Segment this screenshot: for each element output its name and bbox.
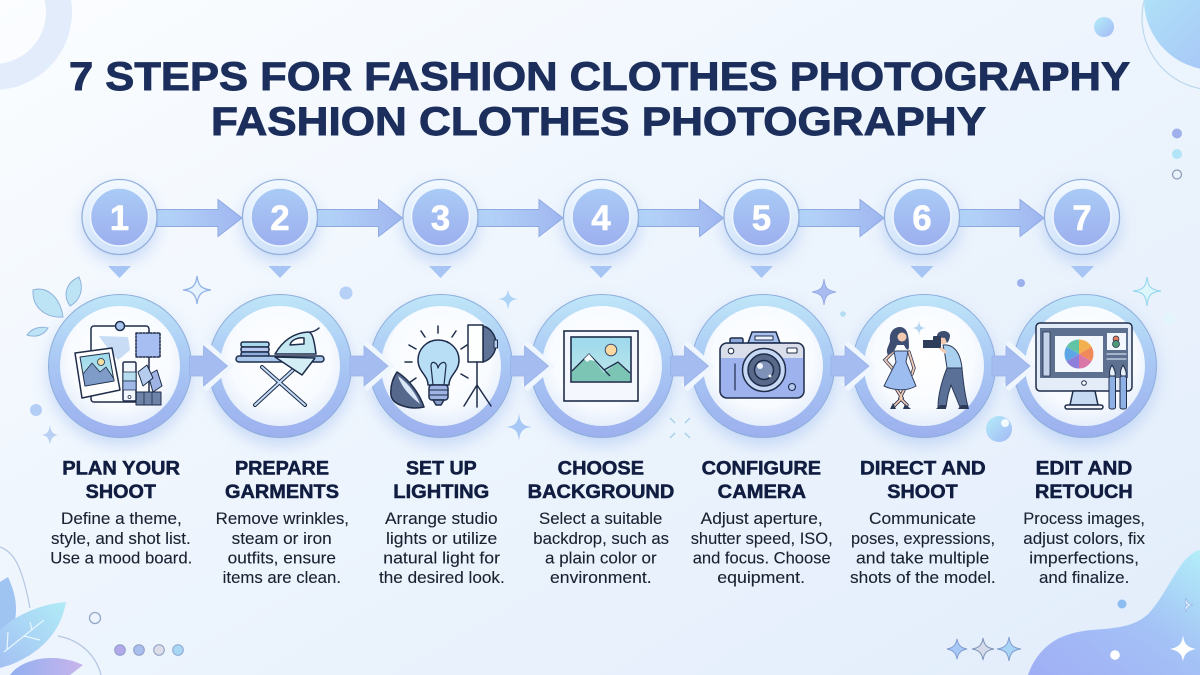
title: 7 STEPS FOR FASHION CLOTHES PHOTOGRAPHY: [69, 55, 1130, 99]
step 4 text: [528, 458, 674, 587]
icon: camera: [720, 332, 804, 398]
step 5 ring: [692, 294, 834, 438]
step 3 text: LIGHTING: [393, 482, 489, 503]
step 2 text: PREPARE: [235, 458, 329, 480]
step 7 text: and finalize.: [1039, 569, 1129, 587]
step 1 text: Use a mood board.: [50, 550, 192, 568]
step 1 text: PLAN YOUR: [62, 458, 180, 480]
icon: studio lighting: [391, 325, 498, 408]
icon: colour wheel: [1065, 340, 1093, 368]
icon: ironing board: [236, 328, 324, 405]
step 4 ring: [530, 294, 674, 438]
step 5 text: CONFIGURE: [702, 458, 821, 480]
step 6 text: and take multiple: [856, 550, 989, 568]
step 6 text: DIRECT AND: [860, 458, 986, 480]
arrows between number badges: [157, 200, 1044, 236]
decoration: leaves at step 1: [27, 277, 81, 336]
step 7 text: [1023, 458, 1146, 587]
step 7 text: adjust colors, fix: [1023, 530, 1146, 548]
arrows between step rings: [190, 344, 1030, 388]
step 6 text: SHOOT: [887, 482, 958, 503]
number badge 4: 4: [591, 199, 611, 238]
step 4 text: backdrop, such as: [533, 530, 669, 548]
step 5 text: Adjust aperture,: [701, 510, 823, 528]
number badge 1: [82, 180, 157, 254]
icon: framed landscape: [564, 331, 638, 401]
step 1 text: SHOOT: [86, 482, 156, 503]
step 3 text: Arrange studio: [385, 510, 498, 528]
step 5 text: [691, 458, 833, 587]
step 7 text: EDIT AND: [1036, 458, 1132, 480]
number badge 4: [564, 180, 638, 254]
title: FASHION CLOTHES PHOTOGRAPHY: [211, 100, 986, 144]
number badge 2: [242, 180, 318, 254]
step 2 text: [216, 458, 349, 587]
decoration: bottom-right blob: [947, 550, 1200, 675]
step 5 text: equipment.: [717, 569, 805, 587]
step 7 text: RETOUCH: [1035, 482, 1133, 503]
decoration: top-right blob: [1094, 0, 1200, 179]
step 2 text: Remove wrinkles,: [216, 510, 349, 528]
step 4 text: Select a suitable: [539, 510, 662, 528]
step 6 text: [850, 458, 996, 587]
step 7 text: imperfections,: [1029, 550, 1139, 568]
icon: monitor with colour wheel and brushes: [1036, 323, 1132, 409]
step 6 text: poses, expressions,: [851, 530, 995, 548]
number badge 6: [884, 180, 960, 254]
step 1 text: [50, 458, 192, 568]
step 4 text: a plain color or: [545, 550, 657, 568]
step 6 ring: [852, 294, 996, 438]
number badge 2: 2: [270, 199, 290, 238]
step 4 text: CHOOSE: [558, 458, 644, 480]
step 3 text: [379, 458, 505, 587]
step 6 text: shots of the model.: [850, 569, 996, 587]
number badge 7: 7: [1072, 199, 1092, 238]
step 4 text: environment.: [550, 569, 652, 587]
number badge 3: 3: [431, 199, 450, 238]
step 6 text: Communicate: [869, 510, 976, 528]
number badge 5: [724, 180, 799, 254]
step 2 text: outfits, ensure: [228, 550, 336, 568]
step 3 text: SET UP: [406, 458, 477, 480]
step 4 text: BACKGROUND: [528, 482, 674, 503]
title: [69, 55, 1130, 144]
step 5 text: CAMERA: [718, 482, 806, 503]
step 2 text: GARMENTS: [225, 482, 339, 503]
decoration: sparkles and dots: [30, 276, 1175, 445]
decoration: bottom-left leaves: [0, 547, 183, 675]
step 3 text: natural light for: [383, 550, 501, 568]
step 7 ring: [1014, 294, 1156, 438]
step 3 text: the desired look.: [379, 569, 505, 587]
number badge 7: [1044, 180, 1120, 254]
number badge 3: [403, 180, 478, 254]
step 2 text: steam or iron: [232, 530, 332, 548]
step 2 text: items are clean.: [223, 569, 341, 587]
step 5 text: and focus. Choose: [693, 550, 831, 568]
step 3 text: lights or utilize: [386, 530, 497, 548]
pointer triangles: [108, 266, 1094, 278]
icon: mood board and swatches: [75, 322, 162, 405]
number badge 1: 1: [110, 199, 129, 238]
number badge 6: 6: [912, 199, 932, 238]
decoration: top-left ring: [0, 0, 59, 77]
step 1 text: Define a theme,: [61, 510, 182, 528]
icon: model and photographer: [884, 321, 969, 409]
step 1 ring: [48, 294, 192, 438]
step 3 ring: [370, 294, 512, 438]
step 1 text: style, and shot list.: [51, 530, 191, 548]
step 7 text: Process images,: [1023, 510, 1145, 528]
number badge 5: 5: [752, 199, 771, 238]
step 5 text: shutter speed, ISO,: [691, 530, 833, 548]
step 2 ring: [208, 294, 352, 438]
